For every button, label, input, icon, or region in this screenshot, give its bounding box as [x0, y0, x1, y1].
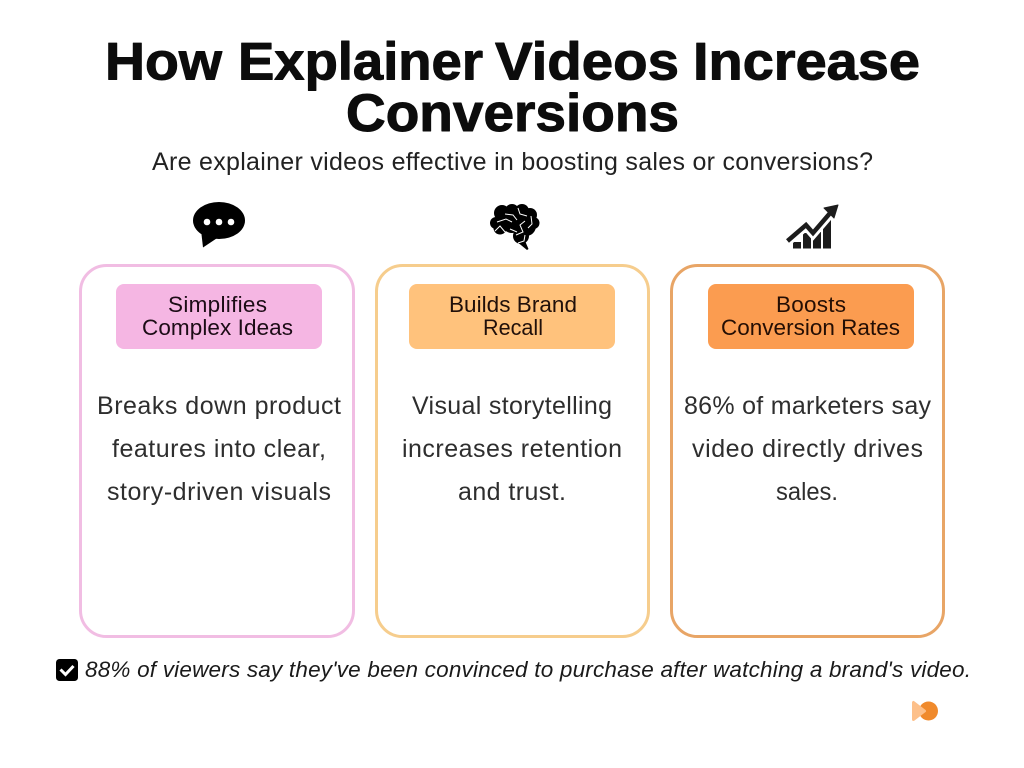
icon: speech bubble	[193, 202, 245, 248]
icon: logo	[914, 702, 938, 720]
panel: builds brand recall	[376, 266, 648, 636]
title: Conversions	[346, 84, 679, 143]
pill: builds brand recall: Recall	[483, 315, 543, 340]
title: How	[105, 32, 222, 92]
body text: simplifies	[97, 392, 341, 506]
pill: builds brand recall	[409, 284, 615, 349]
pill: builds brand recall: Builds Brand	[449, 292, 577, 317]
pill: boosts conversion rates: Boosts	[776, 292, 846, 317]
icon: brain	[490, 204, 540, 250]
title: Videos	[495, 32, 679, 92]
icon: checkbox	[56, 659, 78, 681]
body text: builds brand: and trust.	[458, 478, 566, 506]
title	[105, 32, 920, 143]
body text: boosts: 86% of marketers say	[684, 392, 932, 420]
footer statistic: 88% of viewers say they've been convinced to purchase after watching a brand's video.	[85, 657, 971, 682]
title: Explainer	[238, 32, 483, 92]
body text: boosts: video directly drives	[692, 435, 923, 463]
body text: boosts: sales.	[776, 478, 838, 506]
pill: simplifies complex ideas	[116, 284, 322, 349]
body text: builds brand: increases retention	[402, 435, 622, 463]
body text: simplifies: features into clear,	[112, 435, 326, 463]
body text: builds brand	[402, 392, 622, 506]
body text: boosts	[684, 392, 932, 506]
title: Increase	[693, 32, 920, 92]
panel: boosts conversion rates	[672, 266, 944, 636]
subtitle: Are explainer videos effective in boosting sales or conversions?	[152, 148, 873, 176]
body text: builds brand: Visual storytelling	[412, 392, 612, 420]
pill: simplifies complex ideas: Complex Ideas	[142, 315, 293, 340]
panel: simplifies complex ideas	[80, 266, 354, 636]
pill: boosts conversion rates: Conversion Rates	[721, 315, 900, 340]
pill: simplifies complex ideas: Simplifies	[168, 292, 267, 317]
pill: boosts conversion rates	[708, 284, 914, 349]
body text: simplifies: Breaks down product	[97, 392, 341, 420]
body text: simplifies: story-driven visuals	[107, 478, 331, 506]
icon: growth chart	[786, 205, 838, 248]
